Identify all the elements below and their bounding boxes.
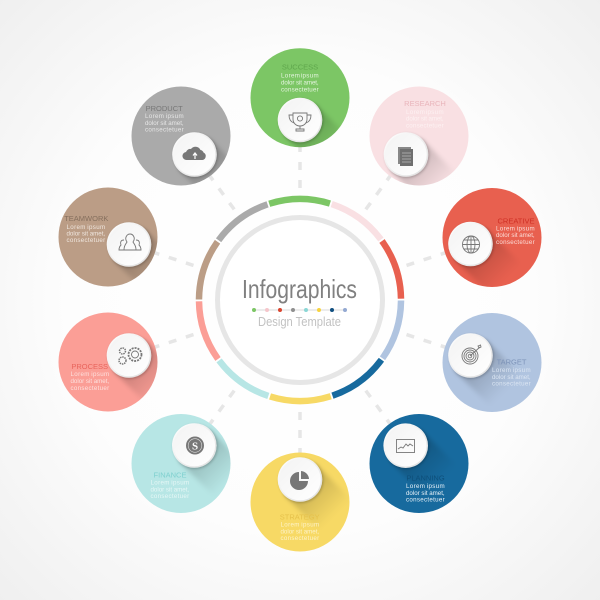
panel: finance: consectetuer [150,493,190,500]
panel: success: Lorem [281,72,300,80]
panel: process: ipsum [91,371,110,378]
panel: process: dolor sit amet, [70,378,110,385]
panel: strategy: Lorem [280,522,300,528]
panel: product: ipsum [166,113,184,120]
panel: planning: ipsum [427,483,445,490]
panel: success [250,48,350,148]
panel: planning: PLANNING [406,474,445,483]
panel: planning: dolor sit amet, [406,490,445,497]
panel: target: TARGET [497,358,527,366]
panel: strategy: ipsum [301,522,320,528]
panel: teamwork [58,188,158,286]
panel: success: consectetuer [281,86,319,94]
icon: document [398,147,413,166]
panel: target: consectetuer [492,380,531,388]
panel: finance: Lorem [150,480,170,486]
panel: teamwork: consectetuer [66,237,106,244]
panel: research: RESEARCH [404,99,446,108]
title: Infographics [242,274,357,304]
colour dot line [252,308,347,312]
panel: product: PRODUCT [146,104,183,113]
icon: globe [462,236,480,253]
panel: planning: Lorem [406,483,425,490]
panel: success: dolor sit amet, [281,80,319,86]
panel: creative [442,188,542,295]
panel: strategy: STRATEGY [280,513,320,522]
panel: success: SUCCESS [282,62,318,72]
panel: product: Lorem [145,113,164,120]
panel: research [370,86,468,186]
panel: finance [132,414,230,513]
icon: gears [119,348,142,364]
panel: strategy: consectetuer [280,535,320,542]
panel: process: Lorem [70,371,90,378]
panel: target: Lorem [492,367,511,374]
icon: coin: S [192,440,198,452]
segmented colour ring [159,159,441,441]
panel: finance: ipsum [171,480,190,486]
panel: product: consectetuer [145,126,184,134]
panel: creative: Lorem [496,226,515,232]
panel: teamwork: TEAMWORK [64,214,108,223]
panel: creative: consectetuer [496,239,535,246]
panel: creative: dolor sit amet, [496,232,535,239]
panel: research: dolor sit amet, [406,116,444,123]
panel: process: consectetuer [70,385,110,392]
inner grey ring [218,218,382,382]
icon: cloud upload [182,147,206,160]
panel: success: ipsum [301,72,319,80]
panel: target [442,313,542,412]
panel: finance: dolor sit amet, [150,486,190,494]
panel: teamwork: ipsum [87,224,106,231]
panel: planning [370,414,468,513]
panel: creative: ipsum [517,226,535,232]
icon: chart [396,440,414,452]
icon: trophy [289,113,311,131]
panel: target: dolor sit amet, [492,374,531,381]
panel: target: ipsum [513,367,531,374]
panel: research: Lorem [406,109,425,116]
panel: process [58,312,158,412]
panel: research: consectetuer [406,122,444,130]
icon: team [119,234,141,250]
panel: teamwork: Lorem [66,224,86,231]
panel: strategy [250,452,351,552]
panel: research: ipsum [426,109,444,116]
panel: creative: CREATIVE [498,216,534,225]
panel: product [132,86,230,186]
dashed connectors [150,142,450,458]
icon: target [462,345,481,364]
panel: finance: FINANCE [154,470,186,479]
panel: product: dolor sit amet, [145,120,184,127]
panel: process: PROCESS [71,362,108,371]
panel: strategy: dolor sit amet, [280,528,320,536]
icon: pie chart [290,471,309,490]
panel: teamwork: dolor sit amet, [66,230,106,238]
subtitle: Design Template [258,315,341,329]
panel: planning: consectetuer [406,496,445,504]
